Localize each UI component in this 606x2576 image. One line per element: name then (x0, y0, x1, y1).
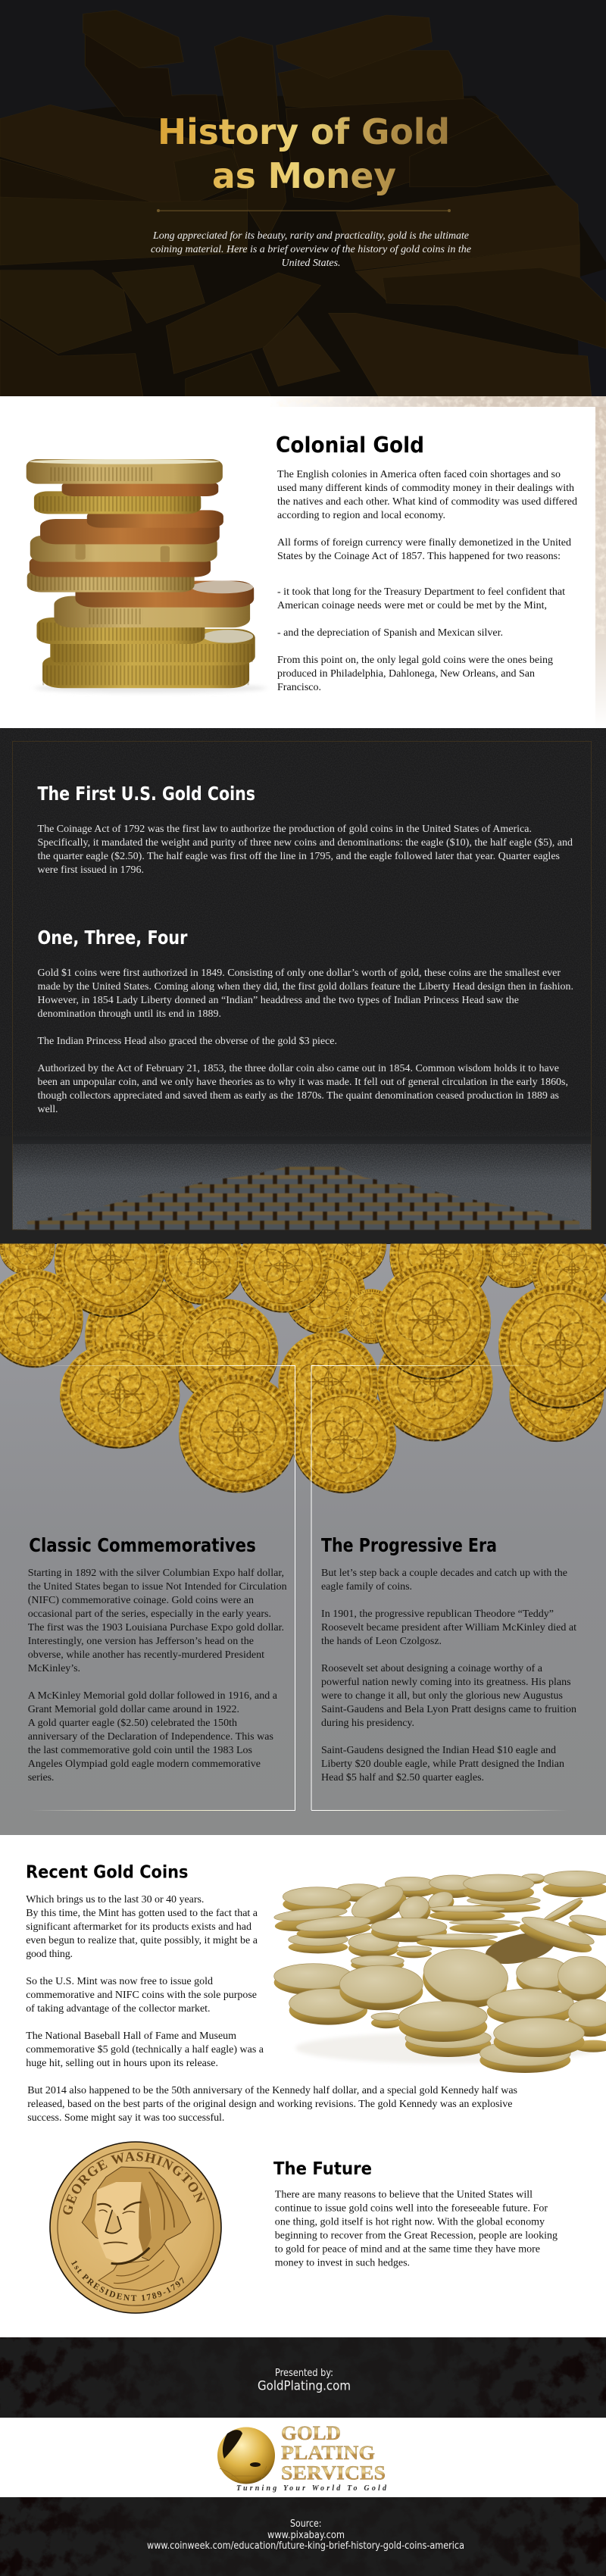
text: recent gold coins body: By this time, the Mint has gotten used to the fact that a (26, 1908, 258, 1919)
text: first coins body (38, 824, 573, 876)
hero background: dark gold bars (0, 0, 606, 396)
text: first coins body: were first issued in 1796. (38, 864, 144, 876)
icon: gold globe (217, 2428, 275, 2484)
heading: progressive era: The Progressive Era (321, 1534, 497, 1556)
text: colonial gold body: the natives and each other. What kind of commodity was used differed (277, 496, 577, 508)
text: classic commemoratives body: obverse, while another has recently-murdered President (28, 1649, 264, 1661)
text: the future body: one thing, gold itself is hot right now. With the global economy (275, 2217, 545, 2227)
text: recent gold coins body: success. Some might say it was too successful. (27, 2112, 224, 2124)
text: one three four body: The Indian Princess Head also graced the obverse of the gold $3 piece. (38, 1036, 337, 1047)
text: recent gold coins body: The National Baseball Hall of Fame and Museum (26, 2030, 236, 2042)
text: classic commemoratives body: McKinley’s. (28, 1663, 80, 1674)
footer band: sources: www.coinweek.com/education/future-king-brief-history-gold-coins-america (147, 2540, 464, 2552)
text: classic commemoratives body: A McKinley Memorial gold dollar followed in 1916, and a (28, 1690, 278, 1702)
text: one three four body: well. (38, 1104, 58, 1115)
text: first coins body: The Coinage Act of 1792 was the first law to authorize the production of gold coins in the United States of America. (38, 824, 532, 835)
logo text: SERVICES (281, 2462, 386, 2484)
text: recent gold coins body: Which brings us to the last 30 or 40 years. (26, 1894, 204, 1905)
text: classic commemoratives body: Interestingly, one version has Jefferson’s head on the (28, 1636, 254, 1647)
text: recent gold coins body: of taking advantage of the collector market. (26, 2003, 211, 2015)
panel frame: right box (311, 1365, 569, 1811)
text: progressive era body: Head $5 half and $2.50 quarter eagles. (321, 1772, 484, 1784)
image: scattered gold coins (0, 1244, 606, 1494)
text: first coins body: Specifically, it mandated the weight and purity of three new coins and denominations: the eagle ($10), the half eagle ($5), and (38, 837, 573, 849)
text: colonial gold body: used many different kinds of commodity money in their dealings with (277, 483, 574, 494)
text: classic commemoratives body: occasional part of the series, especially in the early years. (28, 1608, 271, 1620)
text: colonial gold body: - and the depreciation of Spanish and Mexican silver. (277, 627, 503, 639)
text: classic commemoratives body: anniversary of the Declaration of Independence. This was (28, 1731, 273, 1743)
image: george washington coin: GEORGE WASHINGTON (64, 2152, 205, 2215)
text: one three four body: Gold $1 coins were first authorized in 1849. Consisting of only one dollar’s worth of gold, these coins are the smallest ever (38, 968, 561, 979)
text: progressive era body (321, 1568, 576, 1784)
panel: commemoratives and progressive era (0, 1203, 606, 1835)
title: as Money (212, 155, 396, 196)
text: progressive era body: In 1901, the progressive republican Theodore “Teddy” (321, 1608, 554, 1620)
text: classic commemoratives body: Starting in 1892 with the silver Columbian Expo half dollar, (28, 1568, 284, 1579)
text: classic commemoratives body: The first was the 1903 Louisiana Purchase Expo gold dollar. (28, 1622, 284, 1633)
logo text: PLATING (281, 2442, 375, 2464)
text: recent gold coins body: So the U.S. Mint was now free to issue gold (26, 1976, 213, 1987)
footer band: sources: Source: (290, 2518, 321, 2530)
heading: colonial gold: Colonial Gold (276, 433, 424, 458)
text: the future body: beginning to recover from the Great Recession, people are looking (275, 2231, 558, 2241)
text: progressive era body: the hands of Leon Czolgosz. (321, 1636, 442, 1647)
title: History of Gold (158, 111, 450, 152)
footer band: presented by (0, 2337, 606, 2418)
footer band: presented by: Presented by: (275, 2368, 333, 2379)
text: colonial gold body: Francisco. (277, 682, 321, 693)
image: george washington coin: 1st PRESIDENT 1789-1797 (71, 2261, 184, 2301)
text: recent gold coins body (26, 1894, 517, 2124)
image: george washington coin (49, 2141, 222, 2314)
text: recent gold coins body: But 2014 also happened to be the 50th anniversary of the Kennedy half dollar, and a special gold Kennedy half was (27, 2085, 517, 2096)
text: the future body: continue to issue gold coins well into the foreseeable future. For (275, 2203, 548, 2214)
text: one three four body: made by the United States. Coming along when they did, the first gold dollars feature the Liberty Head design then in fashion. (38, 981, 573, 993)
heading: one three four: One, Three, Four (38, 927, 188, 949)
image: pile of gold bars (27, 1167, 579, 1230)
text: classic commemoratives body: series. (28, 1772, 54, 1784)
logo: gold plating services (0, 2418, 606, 2497)
text: colonial gold body: All forms of foreign currency were finally demonetized in the United (277, 537, 571, 549)
text: progressive era body: were to change it all, but only the glorious new Augustus (321, 1690, 563, 1702)
text: classic commemoratives body: A gold quarter eagle ($2.50) celebrated the 150th (28, 1718, 237, 1729)
text: progressive era body: powerful nation newly coming into its greatness. His plans (321, 1677, 571, 1688)
intro text: Long appreciated for its beauty, rarity and practicality, gold is the ultimate (152, 230, 469, 242)
text: progressive era body: Saint-Gaudens designed the Indian Head $10 eagle and (321, 1745, 556, 1756)
text: first coins body: the quarter eagle ($2.50). The half eagle was first off the line in 1795, and the eagle followed later that year. Quarter eagles (38, 851, 560, 862)
text: classic commemoratives body: the United States began to issue Not Intended for Circulation (28, 1581, 287, 1593)
text: recent gold coins body: significant aftermarket for its products exists and had (26, 1921, 251, 1933)
text: the future body: money to invest in such hedges. (275, 2258, 410, 2268)
panel border (12, 741, 591, 1230)
hero panel (0, 0, 606, 396)
text: recent gold coins body: released, based on the best parts of the original design and working revisions. The gold Kennedy was an explosive (27, 2099, 512, 2110)
panel frame: left box (30, 1365, 295, 1811)
text: colonial gold body (277, 469, 577, 693)
image: pile of coins (273, 1871, 606, 2073)
intro text (151, 230, 471, 269)
panel: recent gold coins and the future (26, 1861, 606, 2314)
text: recent gold coins body: commemorative $5 gold (technically a half eagle) was a (26, 2044, 264, 2055)
image: stack of coins (27, 459, 267, 692)
text: one three four body (38, 968, 573, 1115)
text: colonial gold body: The English colonies in America often faced coin shortages and so (277, 469, 561, 480)
text: classic commemoratives body: Angeles Olympiad gold eagle modern commemorative (28, 1758, 261, 1770)
logo text: GOLD (281, 2422, 341, 2444)
text: colonial gold body: according to region and local economy. (277, 510, 445, 521)
heading: recent gold coins: Recent Gold Coins (26, 1861, 188, 1882)
footer band: sources (0, 2497, 606, 2576)
footer band: presented by: GoldPlating.com (258, 2379, 351, 2394)
text: progressive era body: during his presidency. (321, 1718, 414, 1729)
text: classic commemoratives body (28, 1568, 287, 1784)
text: colonial gold body: produced in Philadelphia, Dahlonega, New Orleans, and San (277, 668, 535, 680)
logo text (281, 2422, 386, 2484)
text: recent gold coins body: even begun to realize that, quite possibly, it might be a (26, 1935, 258, 1946)
text: one three four body: However, in 1854 Lady Liberty donned an “Indian” headdress and the two types of Indian Princess Head saw the (38, 995, 519, 1006)
text: one three four body: denomination through until its end in 1889. (38, 1008, 221, 1020)
heading: first us gold coins: The First U.S. Gold Coins (38, 783, 255, 805)
footer band: sources: www.pixabay.com (267, 2530, 345, 2541)
text: classic commemoratives body: (NIFC) commemorative coinage. Gold coins were an (28, 1595, 254, 1606)
text: one three four body: though collectors appreciated and saved them as early as the 1870s. The quaint denomination ceased production in 1889 as (38, 1090, 559, 1102)
panel: first coins and one three four (0, 728, 606, 1244)
text: colonial gold body: American coinage needs were met or could be met by the Mint, (277, 600, 547, 611)
text: recent gold coins body: good thing. (26, 1949, 73, 1960)
text: recent gold coins body: commemorative and NIFC coins with the sole purpose (26, 1990, 257, 2001)
text: recent gold coins body: huge hit, selling out in hours upon its release. (26, 2058, 218, 2069)
text: classic commemoratives body: Grant Memorial gold dollar came around in 1922. (28, 1704, 239, 1715)
text: progressive era body: Saint-Gaudens and Bela Lyon Pratt designs came to fruition (321, 1704, 576, 1715)
title (158, 111, 450, 196)
text: classic commemoratives body: the last commemorative gold coin until the 1983 Los (28, 1745, 252, 1756)
title divider (157, 209, 451, 212)
text: the future body: There are many reasons to believe that the United States will (275, 2190, 533, 2200)
text: progressive era body: Roosevelt became president after William McKinley died at (321, 1622, 576, 1633)
intro text: United States. (282, 258, 341, 269)
heading: classic commemoratives: Classic Commemoratives (29, 1534, 256, 1556)
text: progressive era body: Roosevelt set about designing a coinage worthy of a (321, 1663, 543, 1674)
text: the future body: to gold for peace of mind and at the same time they have more (275, 2244, 540, 2255)
text: one three four body: Authorized by the Act of February 21, 1853, the three dollar coin also came out in 1854. Common wisdom holds it to have (38, 1063, 559, 1074)
panel: colonial gold (0, 396, 606, 728)
text: progressive era body: Liberty $20 double eagle, while Pratt designed the Indian (321, 1758, 564, 1770)
text: one three four body: been an unpopular coin, and we only have theories as to why it was made. It fell out of general circulation in the early 1860s, (38, 1077, 568, 1088)
text: colonial gold body: States by the Coinage Act of 1857. This happened for two reasons: (277, 551, 561, 562)
intro text: coining material. Here is a brief overview of the history of gold coins in the (151, 244, 471, 255)
heading: the future: The Future (273, 2158, 372, 2179)
text: the future body (275, 2190, 558, 2268)
text: progressive era body: eagle family of coins. (321, 1581, 412, 1593)
logo tagline: Turning Your World To Gold (236, 2484, 387, 2493)
text: colonial gold body: From this point on, the only legal gold coins were the ones being (277, 655, 553, 666)
text: progressive era body: But let’s step back a couple decades and catch up with the (321, 1568, 567, 1579)
text: colonial gold body: - it took that long for the Treasury Department to feel confident that (277, 586, 565, 598)
